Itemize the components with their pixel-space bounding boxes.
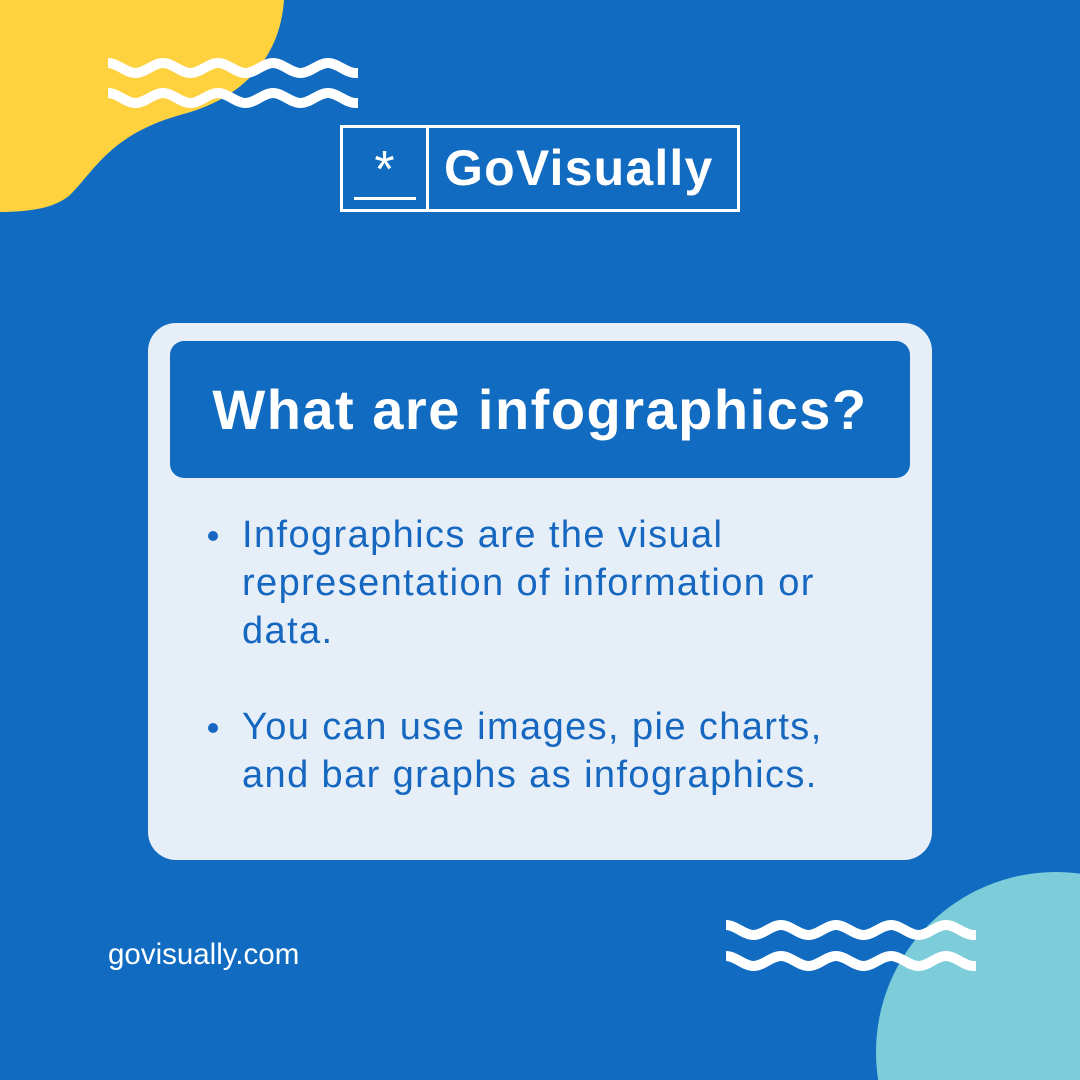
bullet 1: data.: [242, 610, 334, 652]
decor: bottom waves: [726, 920, 976, 971]
icon: asterisk: *: [374, 141, 395, 199]
decor: top waves: [108, 58, 358, 108]
bullet 1: [208, 514, 815, 652]
heading: [170, 341, 910, 478]
bullet 2: You can use images, pie charts,: [242, 706, 823, 748]
decor: teal circle: [876, 872, 1080, 1080]
bullet 1: representation of information or: [242, 562, 815, 604]
text block: bullets: [208, 514, 823, 796]
panel: main card: [148, 323, 932, 860]
heading: What are infographics?: [212, 378, 868, 441]
logo: [340, 125, 740, 212]
decor: yellow blob: [0, 0, 284, 212]
icon: asterisk: [343, 128, 429, 209]
bullet 2: [208, 706, 823, 796]
bullet 1: Infographics are the visual: [242, 514, 723, 556]
footer url: govisually.com: [108, 938, 299, 971]
bullet 2: and bar graphs as infographics.: [242, 754, 818, 796]
logo text: GoVisually: [444, 140, 714, 196]
